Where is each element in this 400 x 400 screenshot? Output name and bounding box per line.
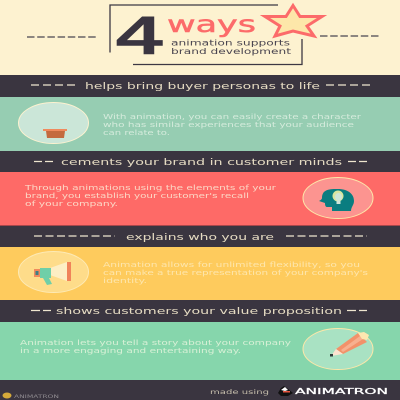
subtitle: animation supports <box>171 38 290 48</box>
icon: head with light bulb <box>303 178 373 218</box>
header panel: brand development <box>171 47 291 56</box>
body text: brand, you establish your customer's recall <box>25 192 249 200</box>
animatron logo <box>278 386 388 396</box>
icon: star <box>265 6 322 36</box>
body text: can relate to. <box>103 129 170 137</box>
made using credit: made using <box>210 388 269 396</box>
section heading bar 4: shows customers your value proposition <box>56 307 342 317</box>
icon: megaphone <box>18 252 88 292</box>
body text: who has similar experiences that your audience <box>103 121 354 129</box>
body text: can make a true representation of your company's <box>103 269 369 277</box>
panel: identity <box>0 247 400 300</box>
section heading bar 4 <box>0 300 400 322</box>
section heading bar 2: cements your brand in customer minds <box>61 158 343 168</box>
panel: brand recall <box>0 172 400 226</box>
panel: buyer personas <box>0 97 400 151</box>
section heading bar 1 <box>0 75 400 97</box>
body text: Animation lets you tell a story about your company <box>20 339 291 347</box>
small logo left <box>2 392 59 400</box>
icon: plant pot <box>18 102 88 144</box>
numeral 4: 4 <box>114 8 166 66</box>
heading: ways: ways <box>167 12 256 38</box>
body text <box>103 113 361 137</box>
section heading bar 3 <box>0 226 400 247</box>
animatron logo: ANIMATRON <box>295 387 388 396</box>
section heading bar 3: explains who you are <box>126 233 274 243</box>
body text: of your company. <box>25 200 118 208</box>
right dashes <box>320 35 381 37</box>
body text <box>103 261 369 285</box>
icon: pencil <box>303 328 373 370</box>
section heading bar 2 <box>0 151 400 172</box>
panel: value proposition <box>0 322 400 380</box>
body text <box>20 339 291 355</box>
header panel <box>0 0 400 75</box>
body text: Animation allows for unlimited flexibility, so you <box>103 261 360 269</box>
footer bar <box>0 380 400 400</box>
body text: identity. <box>103 277 147 285</box>
body text: in a more engaging and entertaining way. <box>20 347 241 355</box>
section heading bar 1: helps bring buyer personas to life <box>85 82 320 92</box>
small logo left: ANIMATRON <box>14 394 59 400</box>
body text <box>23 184 276 208</box>
body text: Through animations using the elements of your <box>23 184 276 192</box>
body text: With animation, you can easily create a character <box>103 113 361 121</box>
title frame <box>110 5 302 64</box>
left dashes <box>27 36 98 38</box>
